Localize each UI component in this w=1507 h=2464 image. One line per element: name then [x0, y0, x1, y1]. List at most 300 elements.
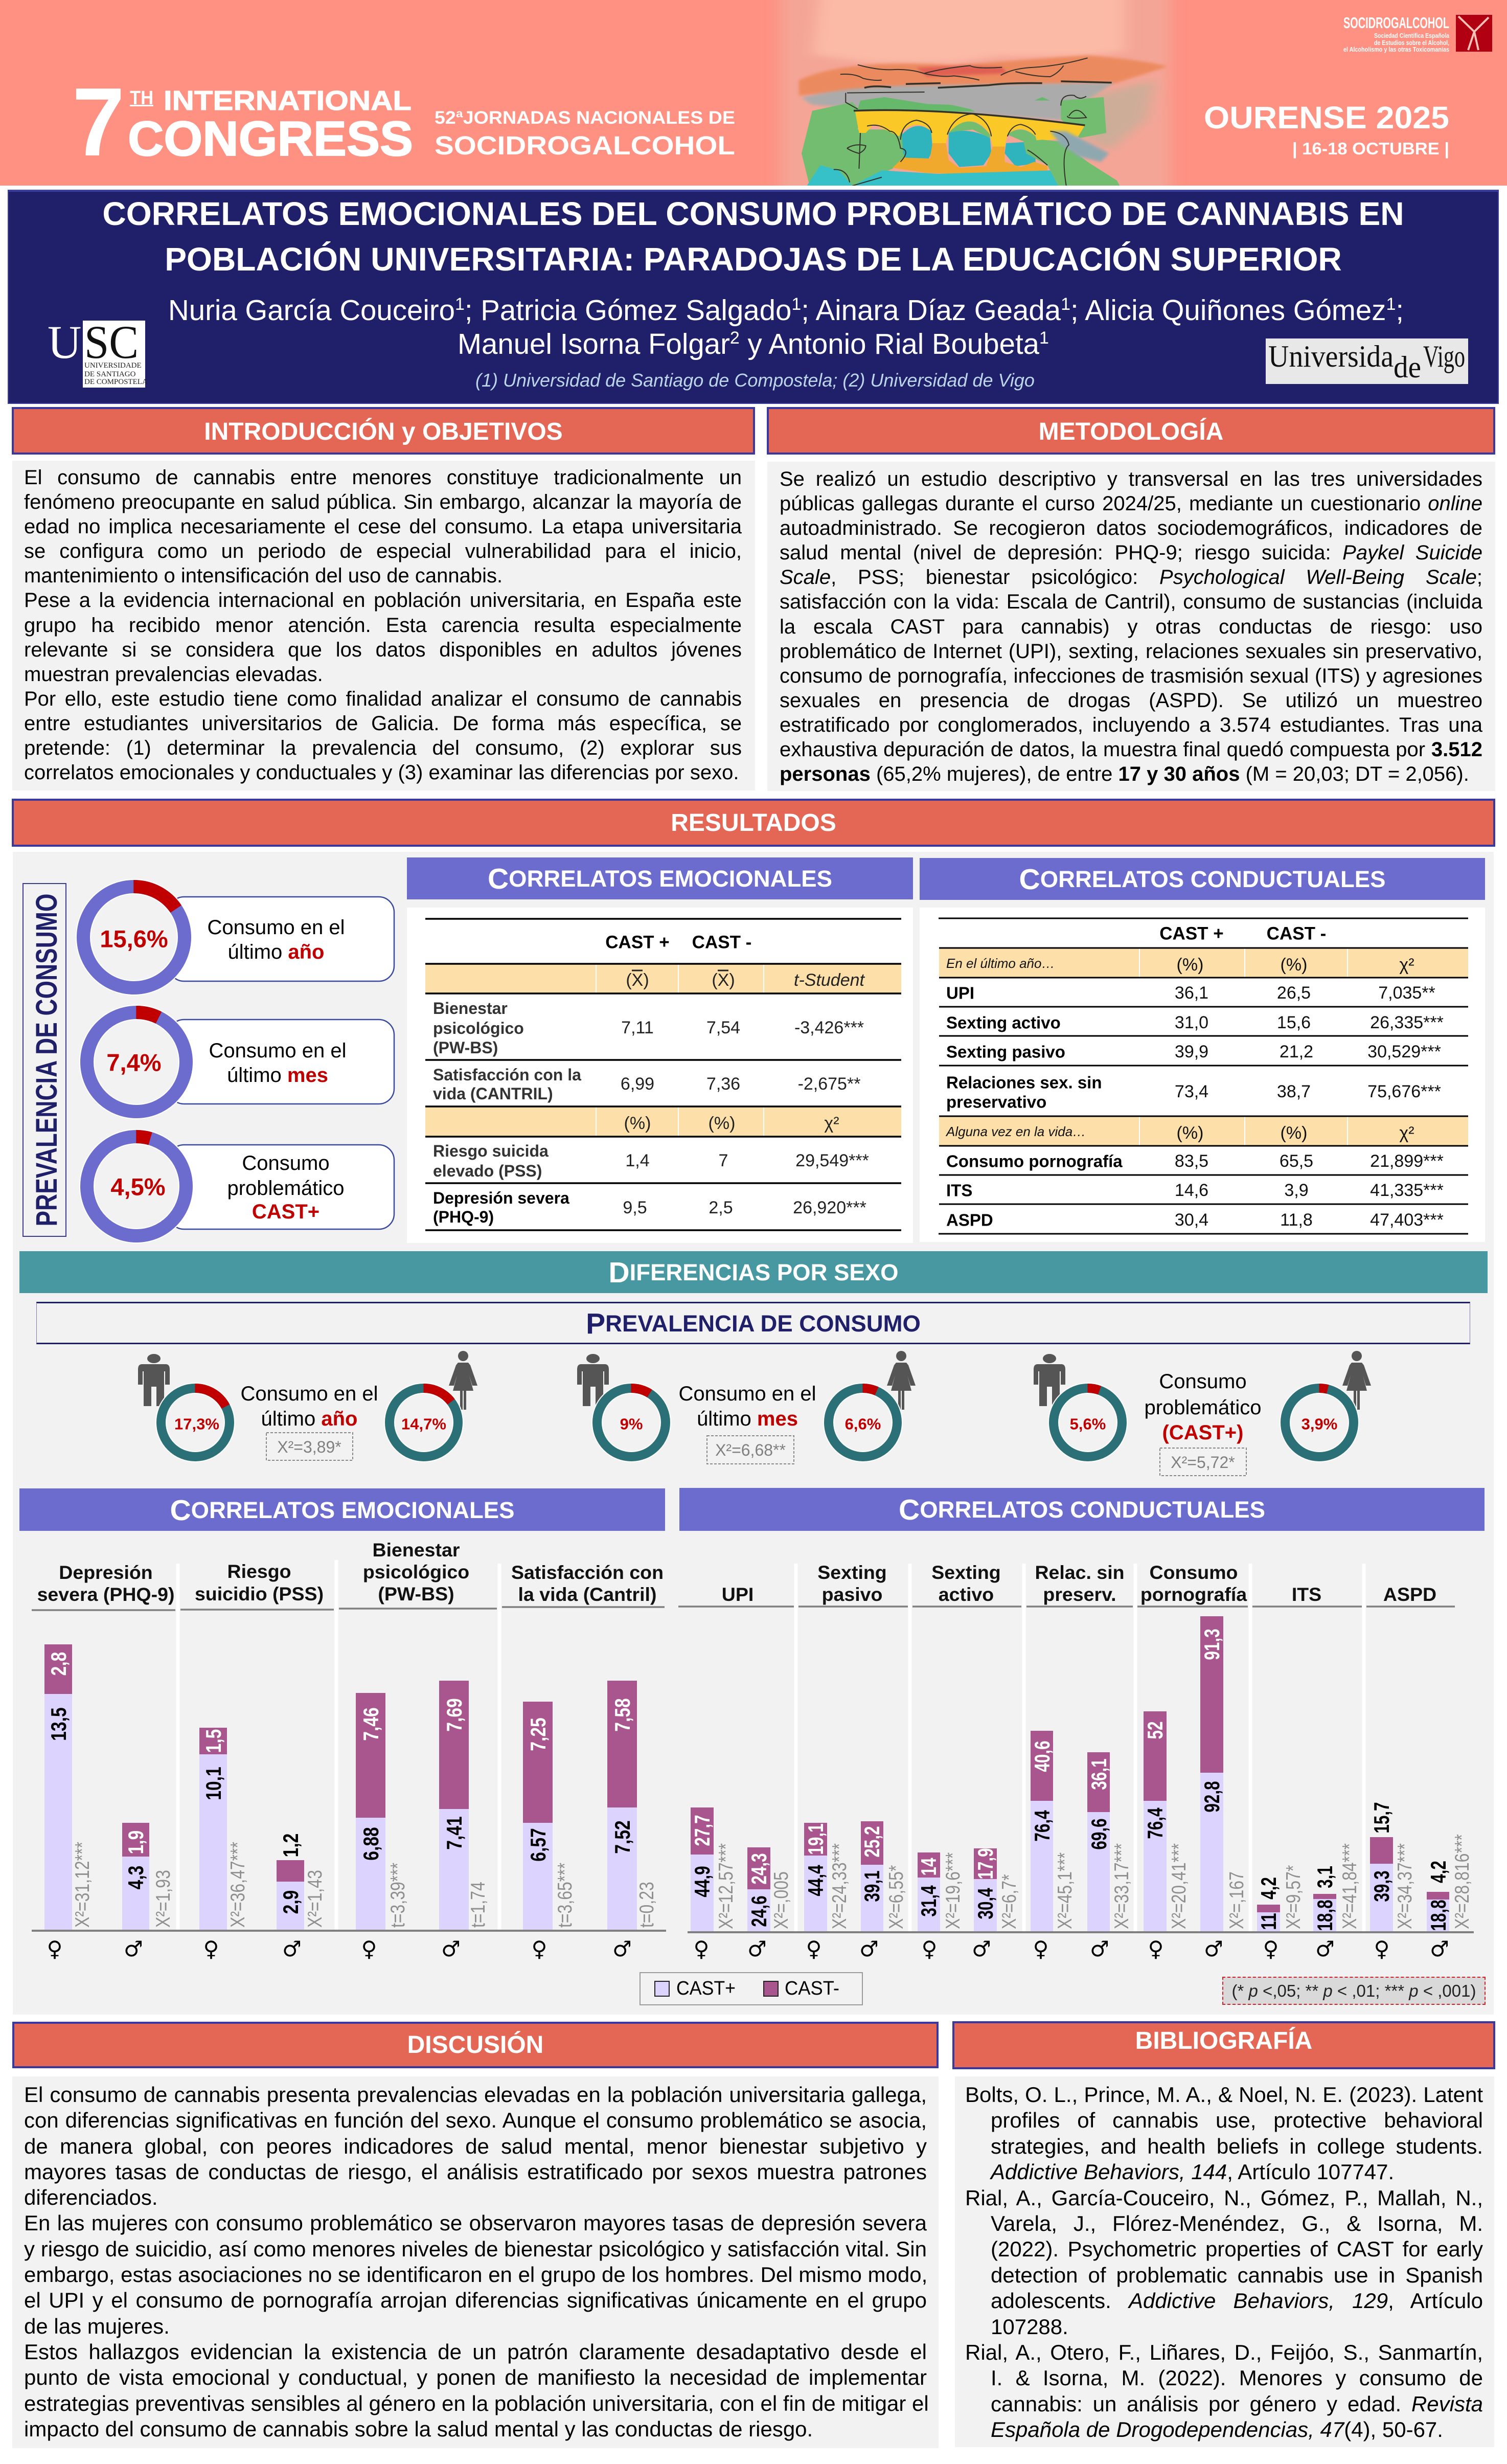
heading: correlatos emocionales por sexo: C: [170, 1494, 191, 1527]
statistics: X²=20,41***: [1168, 1843, 1190, 1929]
statistics: X²=33,17***: [1110, 1843, 1133, 1929]
panel headers: UPI: [722, 1584, 754, 1605]
text: bibliografía: [965, 2083, 1483, 2442]
text: introducción: relevante si se considera que los datos disponibles en adultos jóvenes: [24, 639, 742, 661]
bars: [44, 1644, 637, 1931]
panel headers: preserv.: [1043, 1584, 1116, 1605]
rows: último año: 75,676***: [1367, 1082, 1441, 1101]
text: discusión: de manera global, con peores indicadores de salud mental, menor bienestar subjetivo y: [24, 2134, 927, 2158]
poster title: [102, 195, 1404, 278]
row: satisfacción: -2,675**: [798, 1074, 860, 1094]
row: depresión: Depresión severa: [433, 1189, 569, 1207]
value labels: 10,1: [202, 1767, 226, 1800]
statistics: X²=36,47***: [226, 1842, 249, 1928]
heading: correlatos conductuales por sexo: C: [899, 1494, 920, 1526]
heading: discusión: DISCUSIÓN: [407, 2031, 543, 2059]
society logo: de Estudios sobre el Alcohol,: [1374, 39, 1449, 47]
panel headers: (PW-BS): [378, 1583, 454, 1604]
donut 17,3%: [161, 1388, 230, 1457]
text: bibliografía: strategies, and health beliefs in college students.: [991, 2134, 1483, 2158]
text: bibliografía: (2022). Psychometric properties of CAST for early: [991, 2237, 1483, 2261]
text: discusión: En las mujeres con consumo problemático se observaron mayores tasas de depresión severa: [24, 2211, 927, 2235]
heading: correlatos emocionales: ORRELATOS EMOCIONALES: [509, 866, 832, 892]
text: metodología: [780, 468, 1482, 785]
panel: prevalencia por sexo: [138, 1351, 1371, 1476]
logo: Universidade de Vigo: de: [1394, 350, 1421, 384]
heading: diferencias por sexo: D: [608, 1256, 630, 1289]
row: satisfacción: Satisfacción con la: [433, 1066, 581, 1084]
donut 9%: [597, 1388, 666, 1457]
panel: metodología: [767, 462, 1495, 791]
statistics: X²=1,43: [304, 1870, 326, 1928]
heading: correlatos conductuales por sexo: ORRELATOS CONDUCTUALES: [920, 1497, 1265, 1523]
heading: correlatos emocionales: [407, 857, 913, 899]
heading: metodología: METODOLOGÍA: [1039, 418, 1223, 445]
callout: consumo último año: [169, 897, 394, 981]
rows: alguna vez en la vida: [946, 1151, 1444, 1230]
society logo: el Alcoholismo y las otras Toxicomanías: [1343, 46, 1449, 53]
icon: man: [577, 1354, 609, 1406]
logo: Universidade de Vigo: Universida: [1268, 340, 1394, 373]
row: riesgo suicida: [433, 1142, 869, 1180]
label: consumo problemático: [1144, 1370, 1262, 1476]
panel headers: la vida (Cantril): [518, 1584, 656, 1605]
panel headers: Relac. sin: [1035, 1562, 1125, 1583]
text: bibliografía: profiles of cannabis use, protective behavioral: [991, 2108, 1483, 2132]
row: riesgo suicida: Riesgo suicida: [433, 1142, 549, 1160]
value labels: 4,2: [1257, 1877, 1281, 1900]
row: bienestar: -3,426***: [794, 1018, 864, 1037]
significance note: p: [1409, 1981, 1419, 2000]
panel headers: activo: [939, 1584, 994, 1605]
value labels: 44,9: [690, 1866, 714, 1897]
band: último año: [946, 955, 1414, 975]
statistics: X²=1,93: [152, 1870, 174, 1928]
value labels: 44,4: [804, 1865, 828, 1896]
panel headers: ASPD: [1383, 1584, 1436, 1605]
sex symbols: ♀: [1148, 1936, 1163, 1961]
bars: [691, 1616, 1449, 1932]
value labels: [48, 1652, 635, 1914]
band: último año: (%): [1177, 955, 1203, 975]
donut 15,6%: [83, 887, 185, 988]
authors: Manuel Isorna Folgar2 y Antonio Rial Boubeta1: [458, 328, 1049, 360]
text: discusión: estrategias preventivas sensibles al género en la población universitaria, con el fin de mitigar el: [24, 2391, 929, 2415]
value labels: 4,2: [1426, 1861, 1450, 1883]
rows: último año: 26,5: [1277, 983, 1311, 1003]
donut 7,4%: [87, 1012, 186, 1112]
donut 14,7%: [390, 1388, 458, 1457]
authors: [168, 294, 1404, 360]
heading: bibliografía: [952, 2021, 1495, 2069]
heading: resultados: RESULTADOS: [671, 809, 836, 837]
value labels: 76,4: [1030, 1810, 1054, 1842]
text: introducción: grupo ha recibido menor atención. Esta carencia resulta especialmente: [24, 614, 742, 637]
sex symbols: ♂: [1204, 1936, 1223, 1961]
panel headers: [32, 1539, 665, 1610]
table header: CAST +: [605, 933, 670, 952]
statistics: X²=,167: [1225, 1871, 1248, 1929]
value labels: 7,52: [611, 1820, 635, 1854]
significance note: p: [1323, 1981, 1333, 2000]
row: bienestar: psicológico: [433, 1019, 524, 1037]
value labels: 1,2: [280, 1834, 303, 1857]
panel headers: Riesgo: [227, 1561, 291, 1582]
donut 7,4%: 7,4%: [106, 1049, 162, 1076]
heading: prevalencia de consumo por sexo: REVALENCIA DE CONSUMO: [605, 1310, 921, 1337]
value labels: 30,4: [973, 1888, 997, 1919]
callout: consumo último mes: Consumo en el: [209, 1039, 347, 1062]
text: discusión: impacto del consumo de cannabis sobre la salud mental y las conductas de riesgo.: [24, 2417, 813, 2441]
text: discusión: Estos hallazgos evidencian la existencia de un patrón claramente desadaptativo desde el: [24, 2340, 927, 2364]
text: introducción: Pese a la evidencia internacional en población universitaria, en España este: [24, 589, 742, 612]
sex symbols: ♂: [1315, 1936, 1335, 1961]
label: último mes: [678, 1383, 816, 1464]
rows: último año: preservativo: [946, 1092, 1046, 1112]
value labels: 40,6: [1030, 1740, 1054, 1772]
donut 15,6%: 15,6%: [100, 925, 168, 952]
event title: 7: [72, 68, 125, 176]
venue and date: OURENSE 2025: [1204, 100, 1449, 135]
row: satisfacción: 6,99: [621, 1074, 654, 1094]
congress banner: [0, 0, 1507, 186]
donut 4,5%: 4,5%: [110, 1173, 166, 1201]
text: bibliografía: Rial, A., Otero, F., Liñares, D., Feijóo, S., Sanmartín,: [965, 2340, 1483, 2364]
statistics: [715, 1834, 1473, 1929]
heading: metodología: [767, 407, 1495, 455]
table header: [1159, 923, 1326, 944]
value labels: 92,8: [1200, 1781, 1224, 1813]
value labels: 7,69: [443, 1698, 467, 1732]
legend: CAST+: [676, 1978, 736, 1999]
logo: USC: UNIVERSIDADE: [84, 361, 142, 370]
band: alguna vez en la vida: (%): [1281, 1123, 1307, 1143]
row: depresión: 9,5: [623, 1198, 647, 1217]
panel: prevalencia de consumo: [22, 879, 395, 1244]
text: introducción: muestran prevalencias elevadas.: [24, 663, 323, 686]
event title: TH: [130, 87, 153, 109]
donut 9%: 9%: [620, 1415, 643, 1433]
row: bienestar: 7,54: [706, 1018, 740, 1037]
heading: correlatos emocionales por sexo: ORRELATOS EMOCIONALES: [191, 1497, 514, 1523]
logo: Universidade de Vigo: [1266, 338, 1468, 384]
donut 5,6%: [1054, 1388, 1122, 1457]
sex symbols: ♂: [1430, 1936, 1449, 1961]
value labels: 36,1: [1087, 1758, 1111, 1790]
text: discusión: con diferencias significativas en función del sexo. Aunque el consumo problemático se asocia,: [24, 2108, 927, 2132]
rows: último año: 73,4: [1175, 1082, 1208, 1101]
significance note: p: [1249, 1981, 1258, 2000]
heading: correlatos conductuales por sexo: [679, 1488, 1485, 1531]
value labels: 19,1: [804, 1823, 828, 1855]
painting of the Ourense bridge: [780, 0, 1171, 205]
heading: diferencias por sexo: [19, 1251, 1488, 1293]
rows: alguna vez en la vida: ASPD: [946, 1211, 993, 1229]
heading: correlatos conductuales: [920, 858, 1485, 900]
panel headers: Satisfacción con: [511, 1562, 664, 1583]
value labels: [690, 1629, 1450, 1931]
text: bibliografía: I. & Isorna, M. (2022). Menores y consumo de: [991, 2366, 1483, 2390]
text: discusión: y riesgo de suicidio, así como menores niveles de bienestar psicológico y satisfacción vital. Sin: [24, 2237, 927, 2261]
rows: alguna vez en la vida: 3,9: [1284, 1181, 1309, 1200]
panel headers: psicológico: [363, 1561, 469, 1583]
text: bibliografía: adolescents. Addictive Behaviors, 129, Artículo: [991, 2289, 1483, 2313]
donut 3,9%: 3,9%: [1302, 1415, 1337, 1433]
panel headers: Consumo: [1150, 1562, 1238, 1583]
label: último mes: último mes: [697, 1408, 798, 1430]
band: último año: En el último año…: [946, 956, 1055, 971]
band: medias: t-Student: [794, 970, 865, 990]
label: último año: [240, 1383, 378, 1460]
logo: USC: DE SANTIAGO: [84, 370, 136, 378]
row: satisfacción: vida (CANTRIL): [433, 1084, 553, 1103]
statistics: X²=6,7*: [998, 1874, 1020, 1929]
donut 6,6%: 6,6%: [845, 1415, 881, 1433]
sex symbols: ♀: [47, 1936, 62, 1961]
band: alguna vez en la vida: χ²: [1399, 1123, 1414, 1143]
sex symbols: [694, 1936, 1449, 1961]
donut 5,6%: 5,6%: [1070, 1415, 1106, 1433]
sex symbols: ♀: [532, 1936, 547, 1961]
label: último año: último año: [261, 1408, 357, 1430]
band: porcentajes: (%): [709, 1114, 735, 1133]
text: introducción: [24, 466, 742, 784]
sex symbols: ♀: [694, 1936, 709, 1961]
text: metodología: Scale, PSS; bienestar psicológico: Psychological Well-Being Scale;: [780, 566, 1482, 589]
text: discusión: de las mujeres.: [24, 2314, 170, 2338]
donut 6,6%: [829, 1388, 897, 1457]
band: último año: χ²: [1399, 955, 1414, 975]
rows: último año: 7,035**: [1378, 983, 1435, 1003]
table: correlatos conductuales: [920, 908, 1485, 1242]
sex symbols: ♀: [806, 1936, 821, 1961]
panel: introducción: [12, 461, 755, 790]
label: consumo problemático: problemático: [1144, 1396, 1262, 1419]
statistics: X²=34,37***: [1394, 1843, 1416, 1929]
rows: último año: 21,2: [1280, 1042, 1313, 1061]
value labels: 13,5: [48, 1707, 71, 1741]
text: bibliografía: 107288.: [991, 2315, 1068, 2339]
sex symbols: ♀: [1033, 1936, 1048, 1961]
icon: woman: [1342, 1351, 1371, 1410]
heading: discusión: [12, 2022, 939, 2068]
row: depresión: 26,920***: [793, 1198, 866, 1217]
callout: consumo problemático: Consumo: [242, 1152, 330, 1174]
row: bienestar: [433, 999, 864, 1057]
donut 3,9%: [1285, 1388, 1354, 1457]
band: porcentajes: [624, 1114, 839, 1133]
value labels: 27,7: [690, 1815, 714, 1846]
value labels: 6,88: [360, 1827, 383, 1861]
row: satisfacción: 7,36: [706, 1074, 740, 1094]
rows: alguna vez en la vida: 30,4: [1175, 1210, 1208, 1230]
heading: introducción: INTRODUCCIÓN y OBJETIVOS: [204, 418, 563, 445]
value labels: 91,3: [1200, 1629, 1224, 1660]
significance note: (* <,05; ** < ,01; *** < ,001): [1232, 1981, 1476, 2000]
event title: [72, 68, 735, 176]
poster title: CORRELATOS EMOCIONALES DEL CONSUMO PROBLEMÁTICO DE CANNABIS EN: [102, 195, 1404, 232]
sex symbols: ♂: [441, 1936, 461, 1961]
sex symbols: ♀: [1374, 1936, 1389, 1961]
donut 14,7%: 14,7%: [401, 1415, 446, 1433]
row: bienestar: 7,11: [621, 1018, 654, 1037]
text: bibliografía: Bolts, O. L., Prince, M. A., & Noel, N. E. (2023). Latent: [965, 2083, 1483, 2107]
row: bienestar: Bienestar: [433, 999, 508, 1018]
text: discusión: El consumo de cannabis presenta prevalencias elevadas en la población universitaria gallega,: [24, 2083, 927, 2107]
value labels: 2,9: [280, 1890, 303, 1914]
statistics: X²=12,57***: [715, 1843, 737, 1929]
row: riesgo suicida: 1,4: [625, 1151, 650, 1170]
statistics: t=3,39***: [386, 1863, 409, 1928]
value labels: 39,3: [1369, 1870, 1394, 1902]
table header: [605, 933, 751, 952]
value labels: 3,1: [1313, 1866, 1337, 1888]
rows: alguna vez en la vida: Consumo pornografía: [946, 1151, 1123, 1171]
icon: man: [138, 1354, 170, 1406]
text: introducción: El consumo de cannabis entre menores constituye tradicionalmente un: [24, 466, 742, 489]
rows: último año: 31,0: [1175, 1013, 1208, 1032]
value labels: 39,1: [860, 1870, 884, 1902]
statistics: t=3,65***: [554, 1863, 576, 1928]
panel headers: severa (PHQ-9): [37, 1584, 174, 1605]
significance note: [1222, 1977, 1486, 2005]
event title: CONGRESS: [128, 111, 413, 166]
callout: consumo problemático: problemático: [227, 1177, 345, 1200]
value labels: 1,9: [125, 1830, 148, 1854]
table header: CAST +: [1159, 923, 1224, 944]
statistics: X²=6,55*: [885, 1865, 907, 1929]
sex symbols: ♀: [361, 1936, 377, 1961]
rows: alguna vez en la vida: 14,6: [1175, 1181, 1208, 1200]
text: discusión: el UPI y el consumo de pornografía arrojan diferencias significativas únicamente en el grupo: [24, 2288, 927, 2312]
society logo: SOCIDROGALCOHOL: [1343, 14, 1449, 32]
heading: prevalencia de consumo por sexo: [36, 1302, 1470, 1344]
rows: alguna vez en la vida: ITS: [946, 1181, 972, 1200]
value labels: 69,6: [1087, 1818, 1111, 1850]
text: metodología: personas (65,2% mujeres), de entre 17 y 30 años (M = 20,03; DT = 2,056).: [780, 763, 1469, 785]
value labels: 24,6: [747, 1895, 771, 1927]
affiliations: (1) Universidad de Santiago de Compostela; (2) Universidad de Vigo: [475, 370, 1035, 391]
sex symbols: ♀: [203, 1936, 219, 1961]
sex symbols: ♂: [859, 1936, 879, 1961]
heading: correlatos conductuales: ORRELATOS CONDUCTUALES: [1040, 866, 1385, 892]
row: satisfacción: [433, 1066, 860, 1103]
sex symbols: [47, 1936, 632, 1961]
text: bibliografía: Rial, A., García-Couceiro, N., Gómez, P., Mallah, N.,: [965, 2186, 1483, 2210]
rows: último año: 39,9: [1175, 1042, 1208, 1061]
sex symbols: ♀: [1263, 1936, 1278, 1961]
statistics: t=1,74: [467, 1882, 489, 1928]
icon: woman: [887, 1351, 916, 1410]
heading: bibliografía: BIBLIOGRAFÍA: [1135, 2027, 1312, 2054]
society logo: Sociedad Científica Española: [1374, 32, 1450, 39]
panel headers: Sexting: [817, 1562, 887, 1583]
event title: 52ªJORNADAS NACIONALES DE: [435, 108, 735, 128]
value labels: 24,3: [747, 1853, 771, 1885]
text: introducción: pretende: (1) determinar la prevalencia del consumo, (2) explorar sus: [24, 737, 742, 759]
text: bibliografía: Addictive Behaviors, 144, Artículo 107747.: [991, 2160, 1394, 2184]
table: correlatos emocionales: [407, 908, 913, 1243]
value labels: 14: [917, 1858, 941, 1876]
rows: alguna vez en la vida: 47,403***: [1370, 1210, 1444, 1230]
text: introducción: entre estudiantes universitarios de Galicia. De forma más específica, se: [24, 712, 742, 735]
text: metodología: públicas gallegas durante el curso 2024/25, mediante un cuestionario online: [780, 492, 1482, 515]
label: último año: Consumo en el: [240, 1383, 378, 1405]
label: último mes: X²=6,68**: [715, 1441, 786, 1459]
venue and date: [1204, 100, 1449, 158]
text: bibliografía: cannabis: un análisis por género y edad. Revista: [991, 2392, 1483, 2416]
sex symbols: ♂: [612, 1936, 632, 1961]
venue and date: | 16-18 OCTUBRE |: [1292, 139, 1449, 158]
panel headers: pasivo: [822, 1584, 882, 1605]
text: discusión: embargo, estas asociaciones no se identificaron en el grupo de los hombres. Del mismo modo,: [24, 2263, 927, 2287]
sex symbols: ♂: [124, 1936, 143, 1961]
panel: resultados: [13, 852, 1494, 2015]
label: consumo problemático: X²=5,72*: [1171, 1453, 1235, 1472]
value labels: 15,7: [1369, 1802, 1394, 1834]
icon: man: [1034, 1354, 1065, 1406]
band: alguna vez en la vida: [945, 1123, 1414, 1143]
heading: correlatos emocionales por sexo: [19, 1488, 665, 1531]
logo: USC: DE COMPOSTELA: [84, 378, 148, 386]
table header: CAST -: [692, 933, 751, 952]
text: introducción: fenómeno preocupante en salud pública. Sin embargo, alcanzar la mayoría de: [24, 491, 742, 513]
panel headers: Sexting: [931, 1562, 1001, 1583]
panel headers: suicidio (PSS): [195, 1583, 324, 1604]
text: bibliografía: detection of problematic cannabis use in Spanish: [991, 2263, 1483, 2287]
text: introducción: correlatos emocionales y conductuales y (3) examinar las diferencias por sexo.: [24, 761, 739, 784]
row: bienestar: (PW-BS): [433, 1038, 498, 1057]
callout: consumo problemático: CAST+: [252, 1201, 319, 1223]
event title: SOCIDROGALCOHOL: [435, 131, 735, 160]
poster title: POBLACIÓN UNIVERSITARIA: PARADOJAS DE LA EDUCACIÓN SUPERIOR: [165, 241, 1342, 278]
panel headers: pornografía: [1140, 1584, 1247, 1605]
rows: alguna vez en la vida: 21,899***: [1370, 1151, 1444, 1171]
rows: último año: 26,335***: [1370, 1013, 1444, 1032]
rows: alguna vez en la vida: 65,5: [1280, 1151, 1313, 1171]
rows: alguna vez en la vida: 41,335***: [1370, 1181, 1444, 1200]
donut 17,3%: 17,3%: [174, 1415, 219, 1433]
panel headers: Bienestar: [373, 1539, 460, 1561]
text: introducción: se configura como un periodo de especial vulnerabilidad para el inicio,: [24, 540, 742, 562]
band: último año: (%): [1281, 955, 1307, 975]
text: metodología: sexuales en presencia de drogas (ASPD). Se utilizó un muestreo: [780, 689, 1482, 712]
title panel: [8, 190, 1499, 404]
text: discusión: punto de vista emocional y conductual, y ponen de manifiesto la necesidad de implementar: [24, 2365, 927, 2389]
legend: [640, 1972, 863, 2005]
statistics: X²=31,12***: [71, 1842, 94, 1928]
statistics: [71, 1842, 658, 1928]
sex symbols: ♂: [972, 1936, 991, 1961]
band: alguna vez en la vida: Alguna vez en la vida…: [945, 1124, 1086, 1139]
value labels: 4,3: [125, 1866, 148, 1889]
logo: USC: [48, 320, 148, 388]
rows: último año: Sexting pasivo: [946, 1042, 1065, 1061]
value labels: 18,8: [1426, 1900, 1450, 1931]
text: metodología: problemático de Internet (UPI), sexting, relaciones sexuales sin preservativo,: [780, 640, 1482, 663]
value labels: 76,4: [1143, 1807, 1167, 1839]
rows: último año: 36,1: [1175, 983, 1208, 1003]
text: metodología: autoadministrado. Se recogieron datos sociodemográficos, indicadores de: [780, 517, 1482, 539]
value labels: 1,5: [202, 1729, 226, 1753]
legend: CAST-: [785, 1978, 839, 1999]
callout: consumo problemático: [169, 1145, 394, 1229]
value labels: 2,8: [48, 1652, 71, 1676]
row: riesgo suicida: 7: [719, 1151, 728, 1170]
heading: correlatos emocionales: C: [488, 863, 509, 895]
band: medias: [626, 970, 865, 990]
text: discusión: [24, 2083, 929, 2441]
